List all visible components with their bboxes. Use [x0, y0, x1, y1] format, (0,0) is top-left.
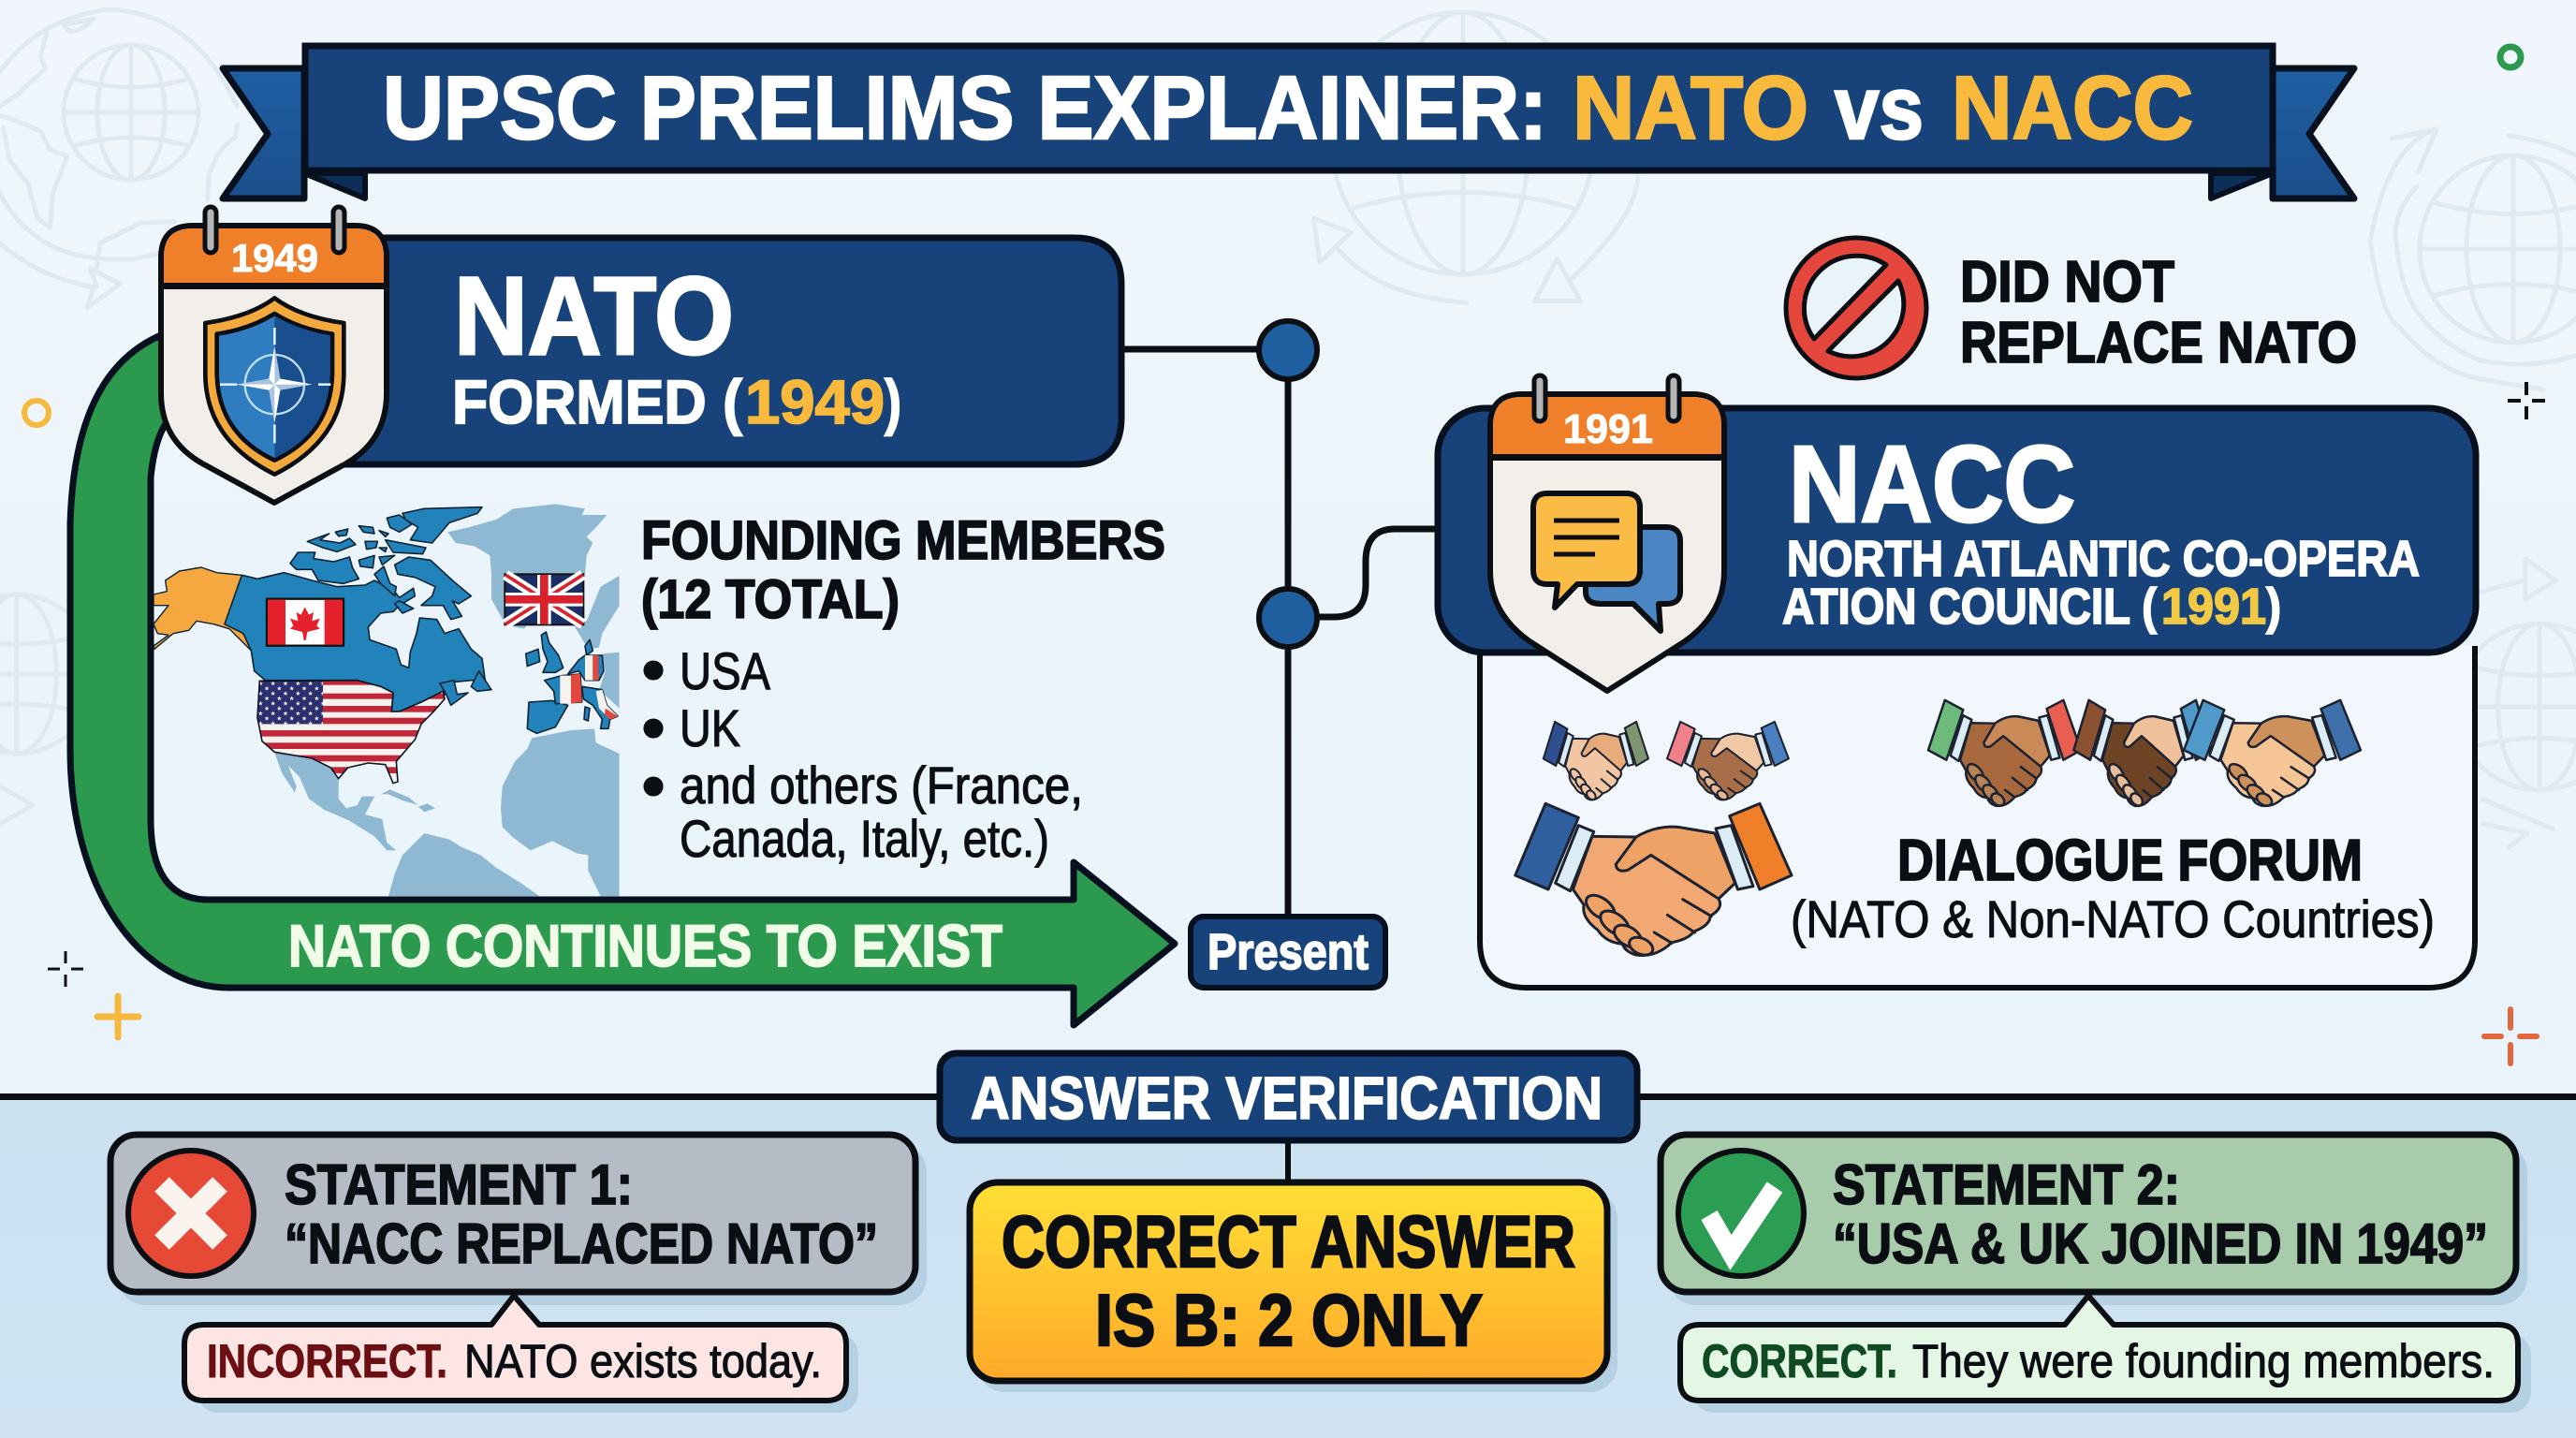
icon: medium handshake 2: [2073, 700, 2212, 807]
statement text: [285, 1153, 878, 1275]
decorative sparkles and rings: [24, 47, 2545, 1064]
arrow: NATO continues to exist: [70, 335, 1175, 1025]
answer verification heading: ANSWER VERIFICATION: [971, 1064, 1603, 1132]
heading: [641, 510, 1165, 630]
NACC full name: [1782, 531, 2420, 635]
NATO header bar: [215, 238, 1121, 464]
panel: NACC: [1438, 375, 2476, 988]
NACC heading: NACC: [1789, 423, 2075, 545]
statement text: STATEMENT 1:: [285, 1153, 633, 1216]
NACC header bar: [1438, 408, 2476, 653]
icon: large handshake: [1515, 803, 1792, 957]
USA flag land: [256, 679, 449, 785]
timeline connector: [1121, 349, 1438, 917]
formed 1949: FORMED (: [452, 367, 742, 436]
text: REPLACE NATO: [1960, 311, 2357, 375]
title text: [383, 58, 2193, 158]
bullet list: Canada, Italy, etc.): [680, 809, 1049, 868]
decorative globes: [0, 9, 2576, 847]
banner body: [305, 46, 2273, 170]
callout: did not replace NATO: [1786, 238, 2357, 378]
calendar shield: NACC 1991: [1490, 375, 1724, 691]
icon: small handshake 2: [1667, 722, 1789, 800]
icon: prohibition sign: [1786, 238, 1926, 378]
formed 1949: [452, 367, 901, 436]
present label: [1191, 917, 1385, 988]
founding members text: [641, 510, 1165, 868]
dialogue forum text: DIALOGUE FORUM: [1897, 829, 2363, 893]
statement text: “USA & UK JOINED IN 1949”: [1833, 1212, 2488, 1275]
Europe: [526, 632, 618, 733]
formed 1949: 1949: [745, 367, 885, 436]
title text: NATO: [1573, 58, 1808, 158]
verdict callout: [184, 1296, 858, 1413]
timeline node: NACC: [1259, 589, 1317, 647]
map: founding members: [154, 504, 620, 896]
icon: medium handshake 1: [1928, 700, 2081, 807]
panel body: [1480, 646, 2475, 988]
icon: medium handshake 3: [2184, 700, 2361, 807]
year 1949: 1949: [231, 236, 318, 280]
panel: correct answer: IS B: 2 ONLY: [1095, 1279, 1483, 1361]
verdict callout: NATO exists today.: [464, 1335, 822, 1387]
arrow label: NATO CONTINUES TO EXIST: [288, 914, 1003, 979]
icons: handshakes: [1515, 700, 2361, 957]
verdict callout: They were founding members.: [1912, 1335, 2495, 1387]
title banner: [223, 46, 2354, 198]
statement text: STATEMENT 2:: [1833, 1153, 2180, 1216]
NACC full name: 1991: [2161, 579, 2266, 635]
statement text: [1833, 1153, 2488, 1275]
bullet list: USA: [680, 641, 771, 700]
NATO heading: NATO: [454, 255, 734, 378]
heading: (12 TOTAL): [641, 569, 900, 630]
text: [1960, 250, 2357, 375]
connector: heading to answer: [1285, 1140, 1291, 1183]
timeline node: NATO: [1259, 321, 1317, 379]
icon: green check: [1678, 1151, 1804, 1276]
year 1991: 1991: [1563, 406, 1653, 452]
title text: vs: [1835, 58, 1924, 158]
text: DID NOT: [1960, 250, 2174, 315]
NACC full name: ATION COUNCIL (: [1782, 579, 2157, 635]
icon: NATO shield: [205, 298, 344, 475]
banner right tail: [2211, 68, 2354, 198]
title text: NACC: [1952, 58, 2193, 158]
formed 1949: ): [885, 367, 901, 436]
verdict callout: INCORRECT.: [207, 1335, 447, 1387]
icon: small handshake 1: [1544, 722, 1648, 800]
panel: statement 1: [110, 1135, 927, 1413]
Alaska: [154, 567, 251, 651]
NACC full name: NORTH ATLANTIC CO-OPERA: [1787, 531, 2420, 587]
calendar shield: NATO 1949: [161, 207, 387, 503]
present label: Present: [1208, 924, 1368, 980]
NACC full name: ): [2266, 579, 2281, 635]
UK flag: [505, 574, 583, 624]
icon: red cross: [128, 1151, 254, 1276]
panel: correct answer: CORRECT ANSWER: [1002, 1200, 1575, 1283]
banner left tail: [223, 68, 365, 198]
panel: statement 2: [1661, 1135, 2531, 1413]
dialogue forum text: (NATO & Non-NATO Countries): [1791, 889, 2435, 948]
panel: correct answer: [970, 1182, 1617, 1392]
Canada flag: [267, 599, 344, 646]
verdict callout: CORRECT.: [1702, 1335, 1897, 1387]
icon: chat bubbles: [1533, 493, 1680, 631]
answer divider line: [0, 1093, 2576, 1100]
heading: FOUNDING MEMBERS: [641, 510, 1165, 571]
statement text: “NACC REPLACED NATO”: [285, 1212, 878, 1275]
verdict callout: [1680, 1296, 2531, 1413]
dialogue forum text: [1791, 829, 2435, 948]
Canada: [225, 507, 491, 712]
pale landmasses: [274, 504, 620, 896]
title text: UPSC PRELIMS EXPLAINER:: [383, 58, 1547, 158]
bullet list: [644, 641, 1083, 868]
bullet list: and others (France,: [680, 756, 1083, 814]
bullet list: UK: [680, 698, 740, 757]
